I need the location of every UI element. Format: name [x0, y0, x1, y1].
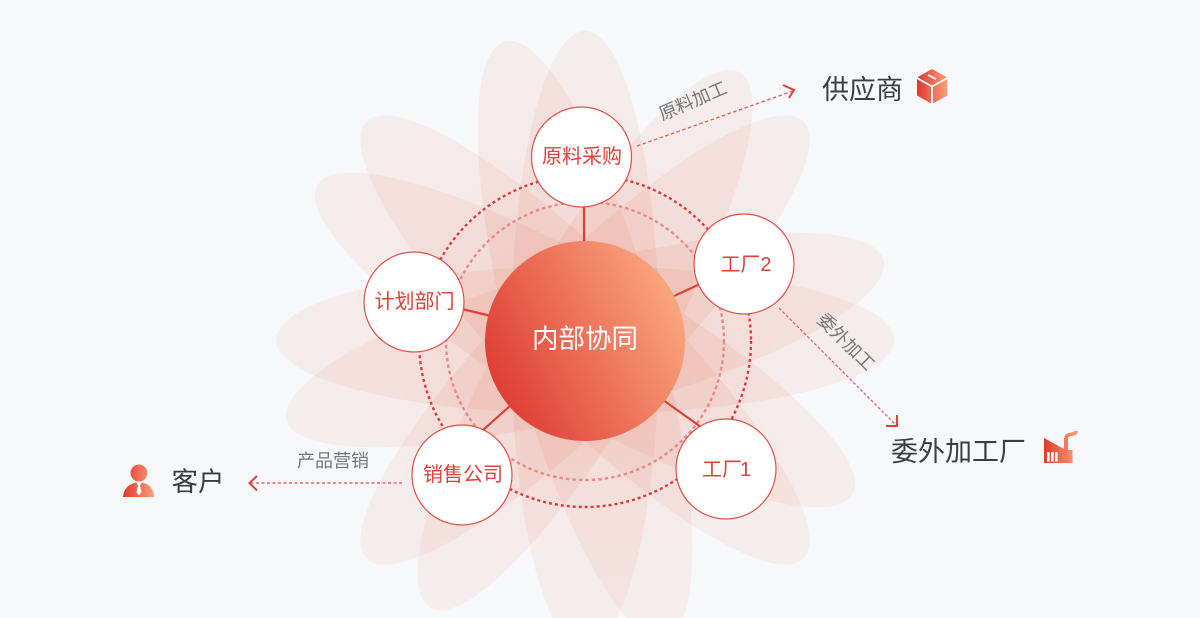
connector lines [462, 205, 701, 431]
node: 工厂1 [676, 419, 776, 519]
arrow: to outsourcing factory [779, 308, 897, 426]
icon: box [917, 69, 948, 104]
inner dotted ring [446, 202, 724, 480]
node: 原料采购 [532, 107, 632, 207]
heading: 客户: 客户 [172, 467, 224, 497]
outer dotted ring [419, 175, 751, 507]
icon: factory [1044, 431, 1078, 463]
flower petals background [267, 31, 903, 618]
arrow: to supplier [637, 85, 794, 146]
icon: person [123, 464, 154, 497]
label: 产品营销: 产品营销 [297, 451, 369, 471]
node: 工厂2: 工厂2 [720, 254, 772, 276]
heading: 委外加工厂: 委外加工厂 [891, 437, 1026, 467]
node: 销售公司 [412, 425, 512, 525]
arrow: to customer [250, 476, 402, 490]
label: 原料加工: 原料加工 [656, 78, 730, 124]
label: 委外加工: 委外加工 [813, 309, 879, 375]
node: 工厂2 [694, 214, 794, 314]
node: 原料采购: 原料采购 [542, 145, 622, 168]
heading: 供应商: 供应商 [822, 75, 903, 105]
node: 销售公司: 销售公司 [423, 463, 503, 486]
node: 工厂1: 工厂1 [702, 459, 751, 481]
center circle: 内部协同 [485, 241, 685, 441]
node: 计划部门: 计划部门 [374, 290, 454, 313]
node: 计划部门 [364, 252, 464, 352]
center circle: 内部协同: 内部协同 [532, 324, 638, 354]
